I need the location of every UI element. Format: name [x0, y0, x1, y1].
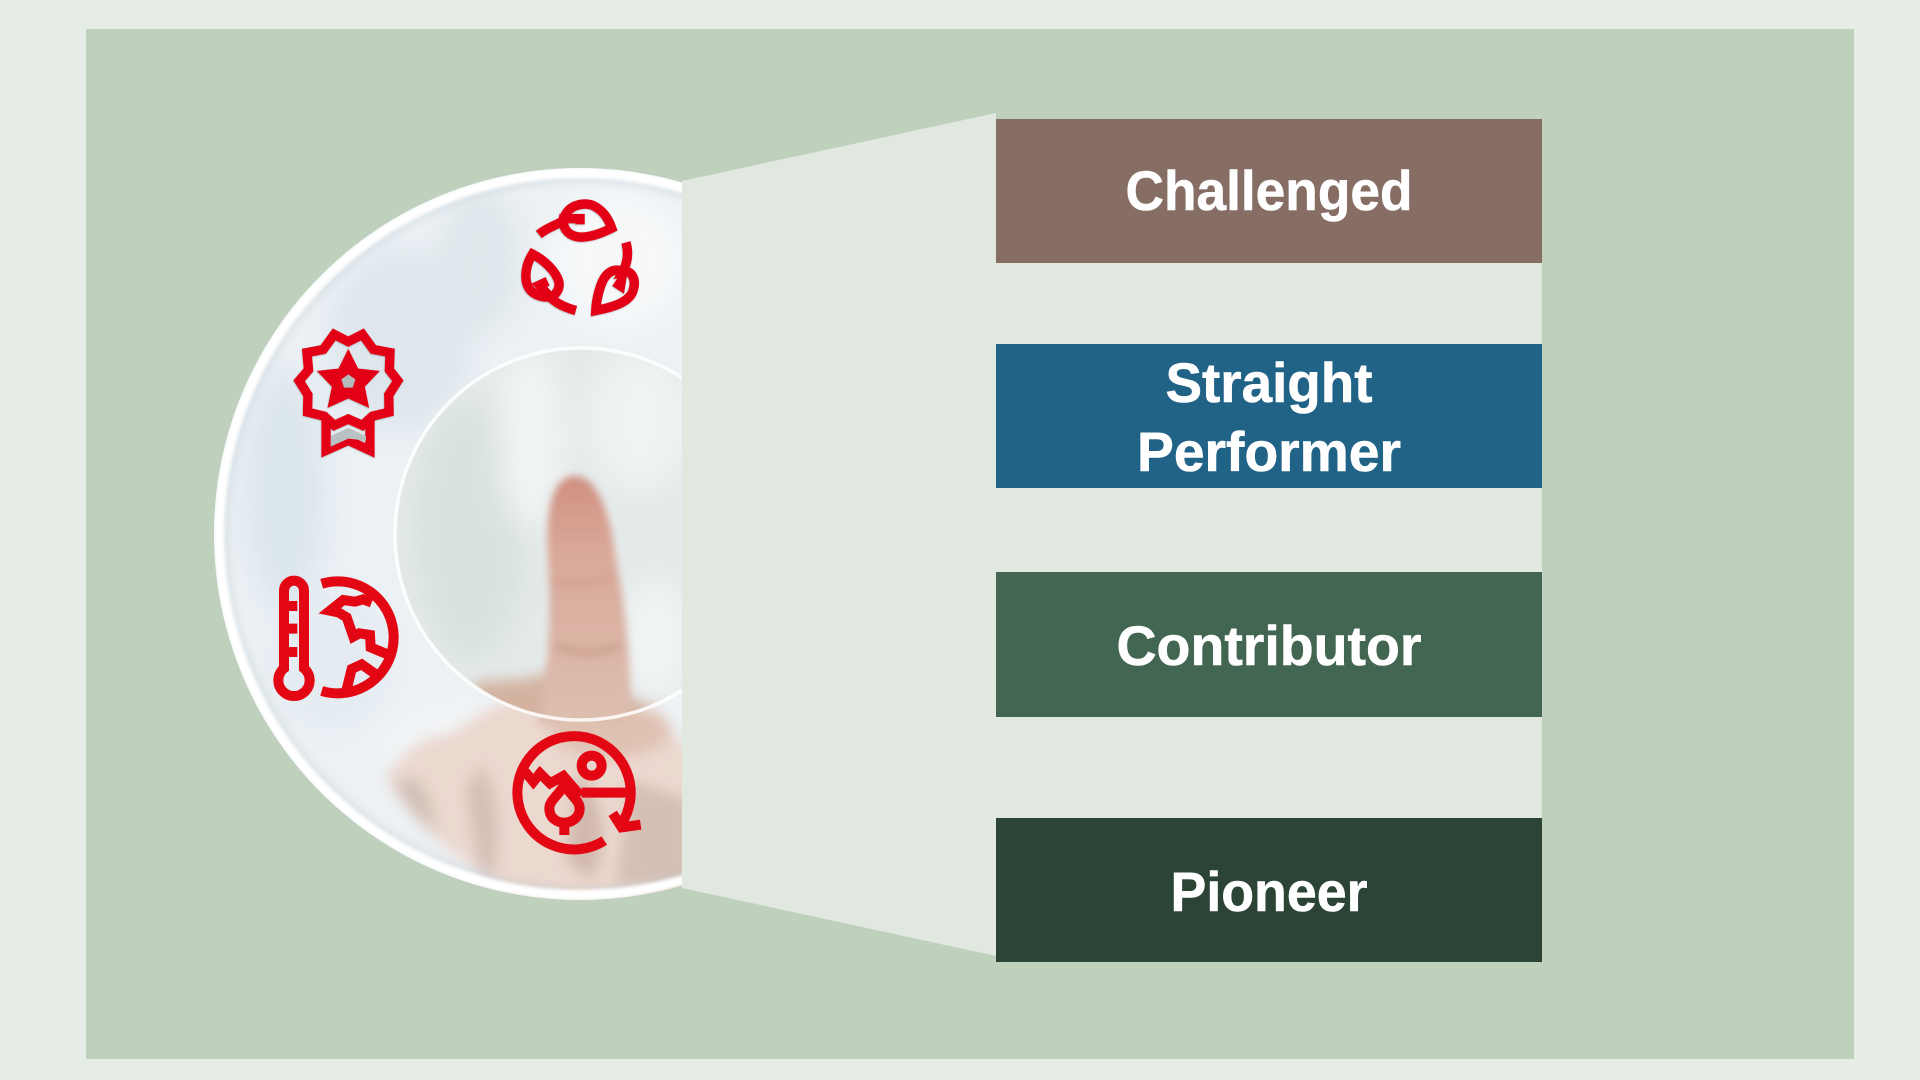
category: Straight Performer: Performer	[1137, 420, 1401, 483]
category: Pioneer: Pioneer	[1170, 860, 1368, 923]
photo semicircle with fingertip	[214, 168, 682, 900]
frosted ring overlay	[400, 710, 682, 884]
category: Challenged: Challenged	[1126, 159, 1412, 222]
icon: award badge with star	[299, 334, 398, 450]
category: Straight Performer: Straight	[1166, 351, 1372, 414]
icon: water cycle	[517, 736, 641, 849]
inner and outer rims	[394, 346, 682, 722]
pointing finger	[538, 476, 632, 725]
category: Pioneer	[996, 818, 1542, 962]
inner circle photo	[397, 350, 682, 714]
hand and fingers	[384, 702, 682, 900]
category: Challenged	[996, 119, 1542, 263]
icon: recycling leaves	[526, 204, 634, 310]
category: Contributor: Contributor	[1116, 614, 1422, 677]
category: Straight Performer	[996, 344, 1542, 488]
funnel connector	[682, 113, 1542, 962]
category: Contributor	[996, 572, 1542, 717]
icon: thermometer and globe	[278, 581, 394, 696]
